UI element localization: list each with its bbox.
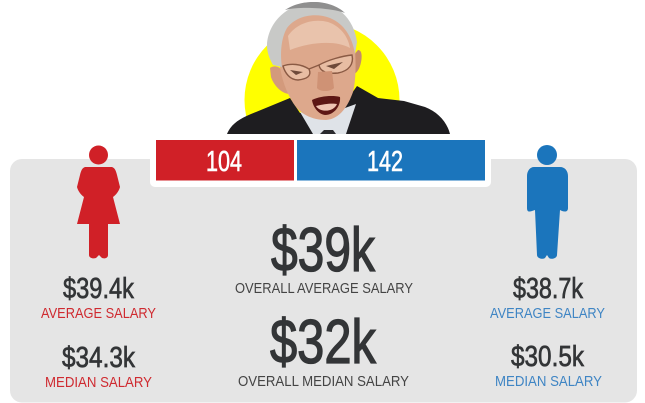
left column: women average [41, 273, 156, 322]
glasses [283, 55, 352, 80]
right column: men median: $30.5k [511, 341, 584, 373]
left column: women median: MEDIAN SALARY [45, 374, 152, 391]
center: overall average: OVERALL AVERAGE SALARY [235, 280, 413, 297]
right column: men average: AVERAGE SALARY [490, 305, 605, 322]
left column: women average: $39.4k [63, 273, 134, 305]
right column: men median: MEDIAN SALARY [495, 373, 602, 390]
left column: women median: $34.3k [62, 342, 135, 374]
left column: women average: AVERAGE SALARY [41, 305, 156, 322]
center: overall average: $39k [271, 216, 376, 285]
bar: women count [156, 140, 294, 180]
bar: women count: 104 [206, 146, 242, 178]
center: overall average [235, 216, 413, 297]
center: overall median: $32k [270, 308, 377, 377]
center: overall median: OVERALL MEDIAN SALARY [238, 373, 409, 390]
icon: man [527, 145, 568, 259]
icon: woman [77, 146, 120, 258]
panel: grey background [10, 159, 637, 402]
right column: men average: $38.7k [513, 273, 583, 305]
bar: men count [297, 140, 485, 180]
bar: men count: 142 [367, 146, 403, 178]
white bar backing [150, 134, 491, 187]
center: overall median [238, 308, 409, 390]
portrait: candidate on yellow circle [227, 2, 450, 178]
right column: men median [495, 341, 602, 390]
right column: men average [490, 273, 605, 322]
left column: women median [45, 342, 152, 391]
